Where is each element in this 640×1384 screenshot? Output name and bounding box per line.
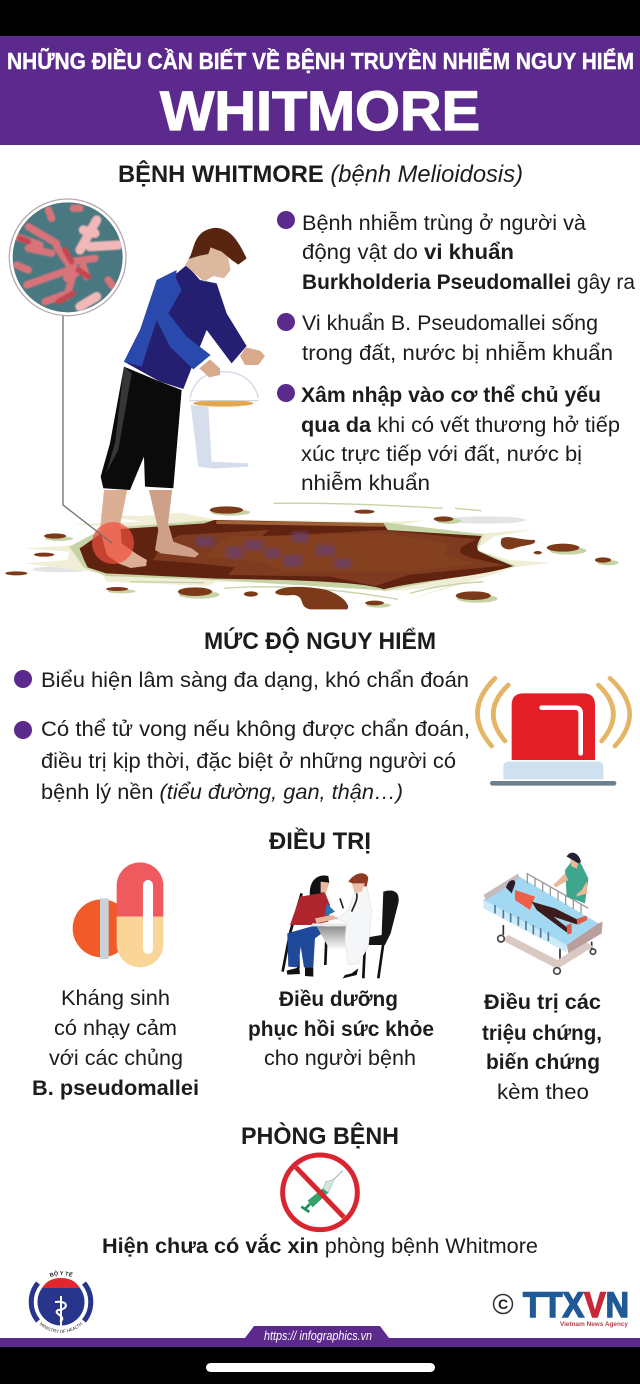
person hands [199,347,265,377]
bottom black bar [0,1347,640,1384]
danger list: điều trị kịp thời, đặc biệt ở những người có [41,750,456,773]
bullet 2: Vi khuẩn B. Pseudomallei sống [302,312,598,335]
logo: Ministry of Health [28,1270,94,1333]
bullet 2: trong đất, nước bị nhiễm khuẩn [302,342,613,365]
illustration: person with bucket [92,228,265,564]
logo: Ministry of Health: MINISTRY OF HEALTH [40,1322,82,1333]
footer bar with url tab [0,1326,640,1347]
bullet 1: Bệnh nhiễm trùng ở người và [302,212,586,235]
antibiotics text: B. pseudomallei [32,1077,199,1100]
bullet 3: xúc trực tiếp với đất, nước bị [301,443,582,466]
logo: TTXVN: Vietnam News Agency [560,1322,629,1328]
bullet 3: nhiễm khuẩn [301,472,430,495]
danger list [14,669,470,804]
symptoms text: triệu chứng, [482,1022,602,1045]
symptoms text [482,991,602,1104]
icon: hospital bed [483,853,603,974]
bullet 1: Burkholderia Pseudomallei gây ra [302,271,635,294]
section heading: danger level: MỨC ĐỘ NGUY HIỂM [204,627,436,655]
care text: Điều dưỡng [279,988,398,1011]
icon: no vaccine syringe [283,1155,357,1230]
header banner [0,36,640,145]
home indicator [206,1363,435,1372]
section heading: treatment: ĐIỀU TRỊ [269,827,371,855]
bullet 1: động vật do vi khuẩn [302,241,514,264]
bucket [189,372,258,469]
person legs and feet [100,490,199,568]
logo: TTXVN: TTXVN [523,1286,629,1325]
bullet 3: Xâm nhập vào cơ thể chủ yếu [301,384,601,407]
top black status bar [0,0,640,36]
antibiotics text [32,987,199,1100]
person head [185,243,231,282]
bullet 2 [277,312,613,365]
care text: cho người bệnh [264,1047,416,1070]
section heading: Whitmore: BỆNH WHITMORE (bệnh Melioidosis) [118,160,523,188]
purple contamination [196,532,351,568]
treatment column: symptoms [482,853,603,1104]
symptoms text: Điều trị các [484,991,601,1014]
treatment column: care [248,873,434,1070]
puddle rim [24,503,551,600]
illustration: mud puddle [5,490,619,609]
shadows [33,516,526,572]
care text: phục hồi sức khỏe [248,1018,434,1041]
bacteria magnifier [9,199,126,543]
person jacket [124,265,247,389]
treatment column: antibiotics [32,862,199,1100]
care text [248,988,434,1070]
icon: pills [73,862,163,967]
antibiotics text: với các chủng [49,1047,183,1070]
mud droplets [5,506,619,609]
antibiotics text: có nhạy cảm [54,1017,177,1040]
symptoms text: biến chứng [486,1051,600,1074]
footer url: https:// infographics.vn [264,1329,372,1343]
person hair [188,228,247,265]
antibiotics text: Kháng sinh [61,987,170,1010]
logo: TTXVN: C [498,1296,508,1312]
icon: doctor and patient [283,873,399,978]
section heading: prevention: PHÒNG BỆNH [241,1122,399,1150]
bullet 3 [277,384,620,495]
bullet 3: qua da khi có vết thương hở tiếp [301,414,620,437]
danger list: Biểu hiện lâm sàng đa dạng, khó chẩn đoán [41,669,469,692]
icon: alarm siren [477,678,630,783]
infected foot spot [92,522,134,564]
symptoms text: kèm theo [497,1081,589,1104]
vaccine statement: Hiện chưa có vắc xin phòng bệnh Whitmore [102,1234,538,1258]
puddle mud [80,520,513,589]
bullet list: description [277,211,635,495]
logo: Ministry of Health: BỘ Y TẾ [50,1270,73,1277]
bullet 1 [277,211,635,294]
danger list: Có thể tử vong nếu không được chẩn đoán, [41,718,470,741]
header title: WHITMORE [160,79,480,142]
person trousers [101,367,182,490]
danger list: bệnh lý nền (tiểu đường, gan, thận…) [41,781,403,804]
